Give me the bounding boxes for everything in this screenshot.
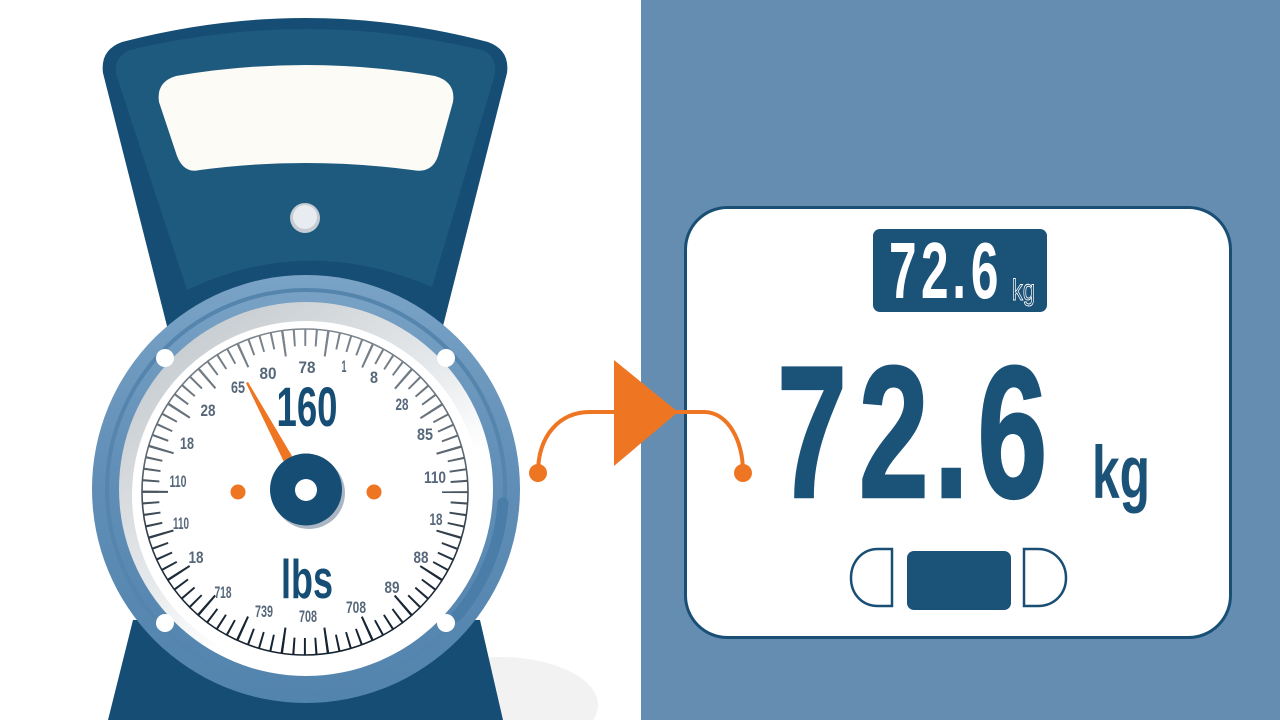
scale numbers: 708 xyxy=(299,607,317,626)
orange dots xyxy=(230,484,382,500)
scale numbers: 28 xyxy=(200,401,216,420)
panel: digital display card xyxy=(686,208,1230,638)
scale numbers: 78 xyxy=(298,358,316,377)
hub xyxy=(270,454,345,529)
scale numbers: 18 xyxy=(180,434,194,453)
value: 160: 160 xyxy=(276,375,338,438)
scale numbers: 739 xyxy=(255,602,273,621)
scale numbers: 110 xyxy=(170,472,186,491)
scale numbers: 18 xyxy=(188,548,204,567)
scale numbers: 8 xyxy=(370,368,378,387)
large value: 72.6 xyxy=(777,327,1047,537)
minor ticks xyxy=(150,338,460,646)
scale head with window xyxy=(103,18,507,330)
major ticks xyxy=(155,342,455,642)
unit: lbs: lbs xyxy=(281,548,333,610)
scale numbers: 80 xyxy=(260,364,276,383)
readout badge: 72.6 xyxy=(889,227,998,316)
dial xyxy=(92,275,520,703)
icon: scale footprint xyxy=(851,549,1066,610)
floor shadow xyxy=(402,657,598,720)
rivets xyxy=(156,349,455,632)
arrow: conversion xyxy=(529,360,752,482)
readout badge xyxy=(873,227,1047,316)
icon: screw xyxy=(290,203,320,233)
scale numbers xyxy=(170,357,446,626)
readout badge: kg xyxy=(1012,274,1035,307)
ring inner shading xyxy=(107,290,505,688)
scale numbers: 718 xyxy=(214,583,232,602)
outer scale line xyxy=(142,329,468,655)
ring highlight arc xyxy=(457,503,503,616)
scale numbers: 708 xyxy=(346,598,366,617)
outer blue ring xyxy=(92,275,520,703)
panel: right blue background xyxy=(641,0,1280,720)
scale numbers: 110 xyxy=(424,468,446,487)
scale numbers: 89 xyxy=(384,578,400,597)
scale numbers: 65 xyxy=(231,378,245,397)
needle xyxy=(246,382,292,462)
scale numbers: 18 xyxy=(430,510,442,529)
scale base xyxy=(108,620,503,720)
window xyxy=(159,65,453,171)
large unit: kg xyxy=(1092,431,1150,514)
scale numbers: 88 xyxy=(414,548,428,567)
scale numbers: 1 xyxy=(342,357,346,376)
scale numbers: 110 xyxy=(173,514,189,533)
dial face xyxy=(132,321,480,669)
scale numbers: 28 xyxy=(396,395,408,414)
bezel xyxy=(119,302,493,676)
scale numbers: 85 xyxy=(417,425,433,444)
